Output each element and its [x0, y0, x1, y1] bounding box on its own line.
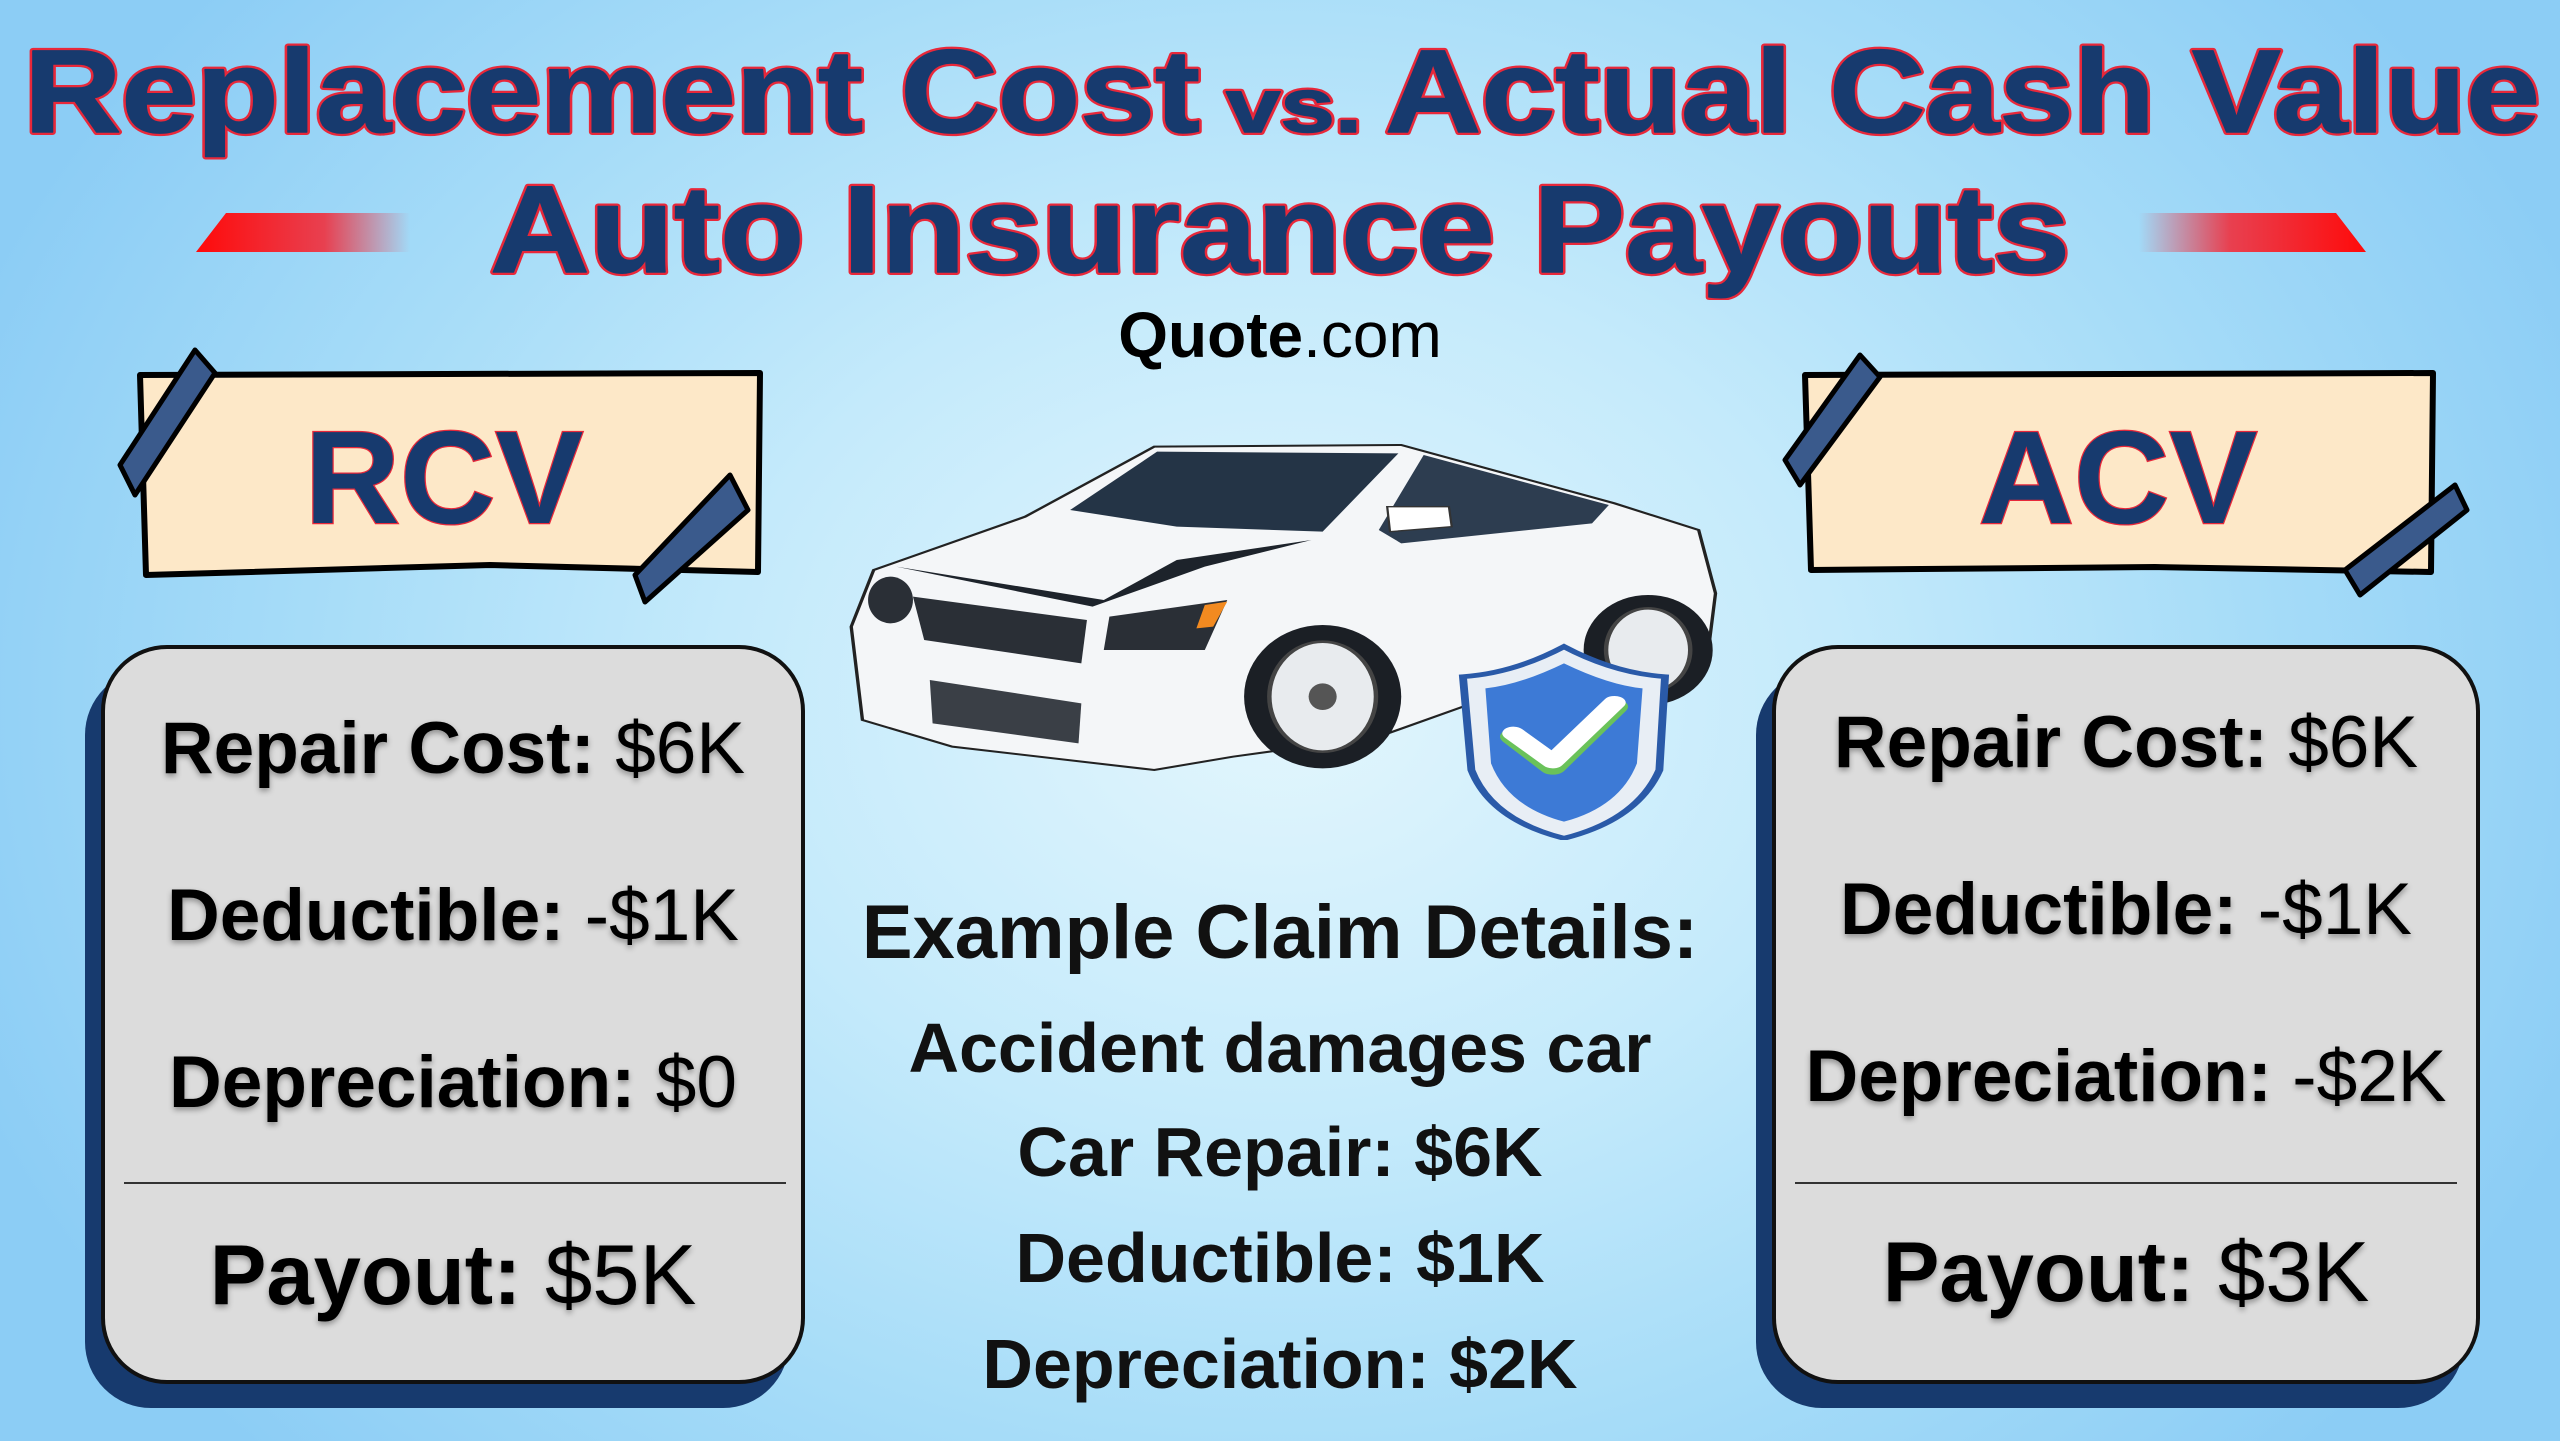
title: Auto Insurance Payouts: [490, 161, 2070, 299]
row: deductible: Deductible: -$1K: [1840, 869, 2412, 950]
wheels: [1244, 625, 1401, 768]
title: Actual Cash Value: [1385, 26, 2540, 158]
label: RCV: [118, 348, 763, 604]
title: vs.: [1226, 64, 1362, 149]
row: payout: Payout: $3K: [1883, 1225, 2369, 1320]
panel: RCV breakdown: [101, 645, 805, 1384]
text: example claim details: [862, 890, 1698, 1403]
label: ACV: ACV: [1979, 404, 2257, 551]
line: Accident damages car: Accident damages car: [908, 1009, 1652, 1087]
shield: [1463, 647, 1665, 838]
title: [24, 26, 2540, 300]
line: Deductible: Deductible: $1K: [1016, 1219, 1544, 1297]
title: vs.: [1226, 64, 1362, 149]
row: payout: Payout: $5K: [210, 1228, 696, 1323]
title: Auto Insurance Payouts: [490, 161, 2070, 299]
row: repair cost: Repair Cost: $6K: [1834, 702, 2418, 783]
label: ACV: [1782, 352, 2470, 598]
line: Depreciation: Depreciation: $2K: [982, 1325, 1578, 1403]
grille and headlights: [913, 597, 1087, 663]
line: Car Repair: Car Repair: $6K: [1017, 1113, 1543, 1191]
row: deductible: Deductible: -$1K: [167, 875, 739, 956]
title: Replacement Cost: [24, 26, 1200, 158]
label: RCV: RCV: [305, 404, 583, 551]
title: Actual Cash Value: [1385, 26, 2540, 158]
title: Replacement Cost: [24, 26, 1200, 158]
row: depreciation: Depreciation: $0: [169, 1042, 737, 1123]
panel: ACV breakdown: [1772, 645, 2480, 1384]
car body: [851, 445, 1716, 770]
illustration: damaged car with shield: [850, 444, 1718, 840]
heading: Example Claim Details: Example Claim Details:: [862, 890, 1698, 975]
row: depreciation: Depreciation: -$2K: [1806, 1036, 2446, 1117]
row: repair cost: Repair Cost: $6K: [161, 708, 745, 789]
logo: Quote.com: Quote.com: [1118, 299, 1442, 371]
